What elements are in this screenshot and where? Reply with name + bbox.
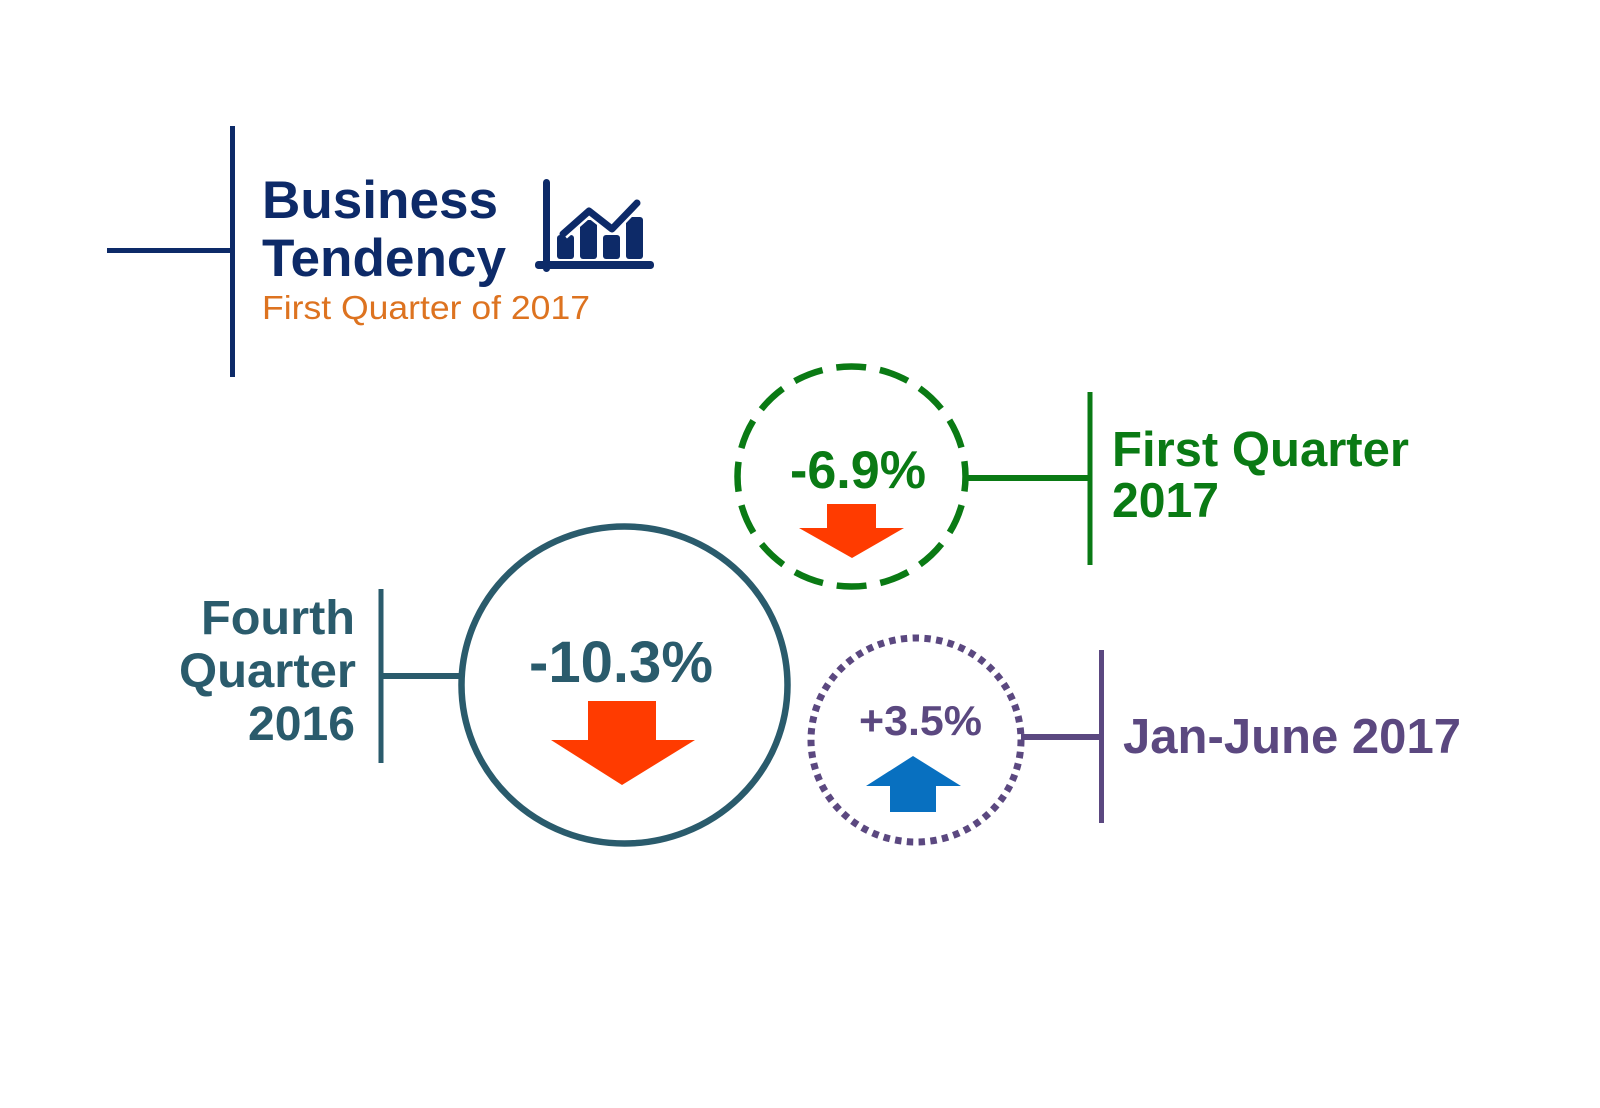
header panel: business tendency	[107, 126, 654, 377]
header bracket lines	[107, 126, 235, 377]
title: Business	[262, 171, 498, 230]
label: Fourth	[201, 592, 355, 645]
value: -10.3%: -10.3%	[529, 630, 713, 695]
label: Jan-June 2017	[1123, 710, 1461, 764]
dashed circle	[738, 366, 966, 586]
label: 2016	[248, 698, 355, 751]
panel: first quarter 2017	[738, 366, 1409, 586]
arrow: up	[866, 756, 961, 812]
connector lines	[963, 392, 1092, 565]
arrow: down	[799, 504, 904, 558]
label: Quarter	[179, 645, 356, 698]
connector lines	[1021, 650, 1104, 823]
title: Tendency	[262, 229, 507, 288]
value: -6.9%: -6.9%	[790, 441, 926, 500]
label	[179, 592, 356, 751]
value: +3.5%: +3.5%	[859, 697, 982, 744]
panel: fourth quarter 2016	[179, 526, 788, 844]
arrow: down	[551, 701, 695, 785]
connector lines	[378, 589, 462, 763]
subtitle: First Quarter of 2017	[262, 289, 590, 326]
solid circle	[462, 526, 788, 844]
label: First Quarter	[1112, 423, 1409, 477]
label	[1112, 423, 1409, 528]
label: 2017	[1112, 474, 1219, 528]
icon: bar chart with trend line	[535, 179, 654, 272]
title	[262, 171, 507, 288]
panel: jan-june 2017	[811, 638, 1461, 842]
dotted circle	[811, 638, 1021, 842]
